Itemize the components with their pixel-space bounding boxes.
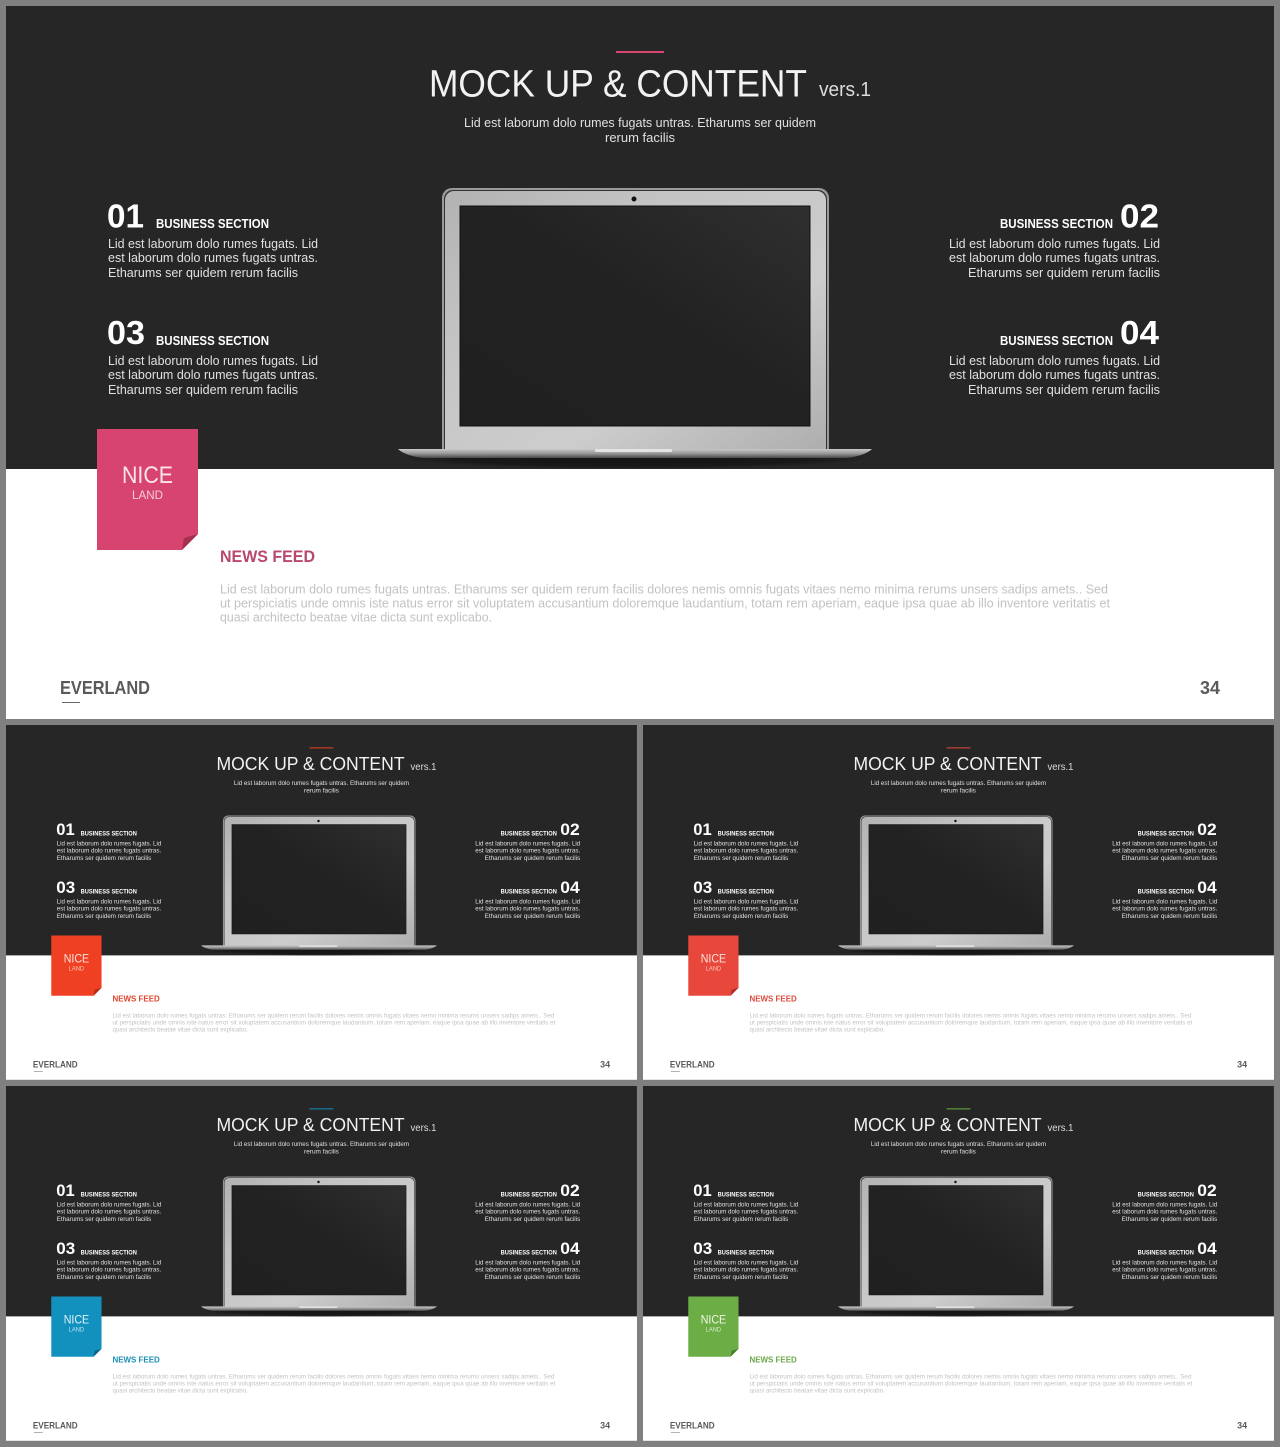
section 02 — [1112, 821, 1218, 862]
section 03: 03 — [693, 879, 712, 897]
section 01: Lid est laborum dolo rumes fugats. Lid — [694, 840, 799, 847]
section 04: Lid est laborum dolo rumes fugats. Lid — [949, 353, 1160, 368]
news feed heading: NEWS FEED — [112, 994, 160, 1004]
section 04: BUSINESS SECTION — [1000, 333, 1113, 348]
section 02: BUSINESS SECTION — [1000, 216, 1113, 231]
section 02 — [949, 198, 1160, 280]
section 03 — [693, 1240, 799, 1281]
section 02 — [475, 1182, 581, 1223]
section 03: est laborum dolo rumes fugats untras. — [57, 906, 161, 913]
section 02: Etharums ser quidem rerum facilis — [485, 855, 580, 862]
footer brand: EVERLAND — [670, 1420, 715, 1430]
section 04: est laborum dolo rumes fugats untras. — [949, 367, 1160, 382]
section 03: est laborum dolo rumes fugats untras. — [108, 367, 318, 382]
footer brand: EVERLAND — [33, 1059, 78, 1069]
section 01: Lid est laborum dolo rumes fugats. Lid — [57, 1201, 162, 1208]
section 01 — [56, 1182, 162, 1223]
section 04: Lid est laborum dolo rumes fugats. Lid — [475, 1260, 581, 1267]
slide: large pink — [6, 6, 1274, 719]
note: NICE LAND: NICE — [64, 951, 89, 965]
section 02: 02 — [560, 1182, 580, 1200]
section 01: 01 — [693, 821, 712, 839]
section 01: est laborum dolo rumes fugats untras. — [694, 1208, 798, 1215]
section 03: 03 — [693, 1240, 712, 1258]
section 01: Etharums ser quidem rerum facilis — [694, 855, 788, 862]
subtitle: rerum facilis — [941, 1149, 976, 1156]
subtitle: Lid est laborum dolo rumes fugats untras. Etharums ser quidem — [464, 115, 816, 130]
section 04 — [1112, 1240, 1218, 1281]
title: vers.1 — [1048, 762, 1074, 773]
news feed text: ut perspiciatis unde omnis iste natus error sit voluptatem accusantium doloremque laudantium, totam rem aperiam, eaque ipsa quae ab illo inventore veritatis et — [112, 1019, 556, 1026]
section 01 — [693, 1182, 799, 1223]
news feed text: Lid est laborum dolo rumes fugats untras. Etharums ser quidem rerum facilis dolores nemis omnis fugats vitaes nemo minima rerums unsers sadips amets.. Sed — [112, 1373, 555, 1380]
section 04: Lid est laborum dolo rumes fugats. Lid — [1112, 1260, 1218, 1267]
accent line — [310, 1107, 333, 1110]
news feed heading: NEWS FEED — [749, 994, 797, 1004]
section 01 — [693, 821, 799, 862]
slide: small blue — [6, 1086, 637, 1441]
section 04: BUSINESS SECTION — [501, 889, 557, 896]
news feed text: Lid est laborum dolo rumes fugats untras. Etharums ser quidem rerum facilis dolores nemis omnis fugats vitaes nemo minima rerums unsers sadips amets.. Sed — [220, 582, 1108, 596]
section 03: Lid est laborum dolo rumes fugats. Lid — [694, 1260, 799, 1267]
laptop — [201, 816, 437, 955]
section 02: Lid est laborum dolo rumes fugats. Lid — [475, 840, 581, 847]
section 01: 01 — [693, 1182, 712, 1200]
section 02: Lid est laborum dolo rumes fugats. Lid — [1112, 840, 1218, 847]
section 04: 04 — [560, 1240, 581, 1258]
title: MOCK UP & CONTENT — [216, 754, 405, 775]
slide: small coral — [643, 725, 1274, 1080]
news feed text: quasi architecto beatae vitae dicta sunt explicabo. — [220, 610, 492, 624]
subtitle: Lid est laborum dolo rumes fugats untras. Etharums ser quidem — [871, 780, 1046, 787]
section 03: 03 — [56, 879, 75, 897]
section 01: BUSINESS SECTION — [156, 216, 269, 231]
page number: 34 — [1237, 1059, 1247, 1069]
section 02 — [475, 821, 581, 862]
accent line — [310, 746, 333, 749]
section 01: est laborum dolo rumes fugats untras. — [694, 847, 798, 854]
title: vers.1 — [411, 762, 437, 773]
section 01: Etharums ser quidem rerum facilis — [57, 855, 151, 862]
subtitle — [871, 1141, 1046, 1156]
section 02: Lid est laborum dolo rumes fugats. Lid — [475, 1201, 581, 1208]
section 01: BUSINESS SECTION — [718, 1191, 774, 1198]
section 02: est laborum dolo rumes fugats untras. — [949, 250, 1160, 265]
subtitle: Lid est laborum dolo rumes fugats untras. Etharums ser quidem — [871, 1141, 1046, 1148]
news feed text: quasi architecto beatae vitae dicta sunt explicabo. — [112, 1387, 248, 1394]
section 04: Etharums ser quidem rerum facilis — [968, 382, 1160, 397]
section 04: 04 — [1197, 879, 1218, 897]
section 03: est laborum dolo rumes fugats untras. — [694, 1267, 798, 1274]
news feed text — [749, 1373, 1193, 1394]
title: vers.1 — [1048, 1123, 1074, 1134]
news feed heading: NEWS FEED — [112, 1355, 160, 1365]
note: NICE LAND: LAND — [706, 966, 722, 972]
section 02: 02 — [1120, 198, 1159, 234]
section 04: 04 — [1120, 314, 1160, 351]
note: NICE LAND: NICE — [701, 951, 726, 965]
title: MOCK UP & CONTENT — [853, 754, 1042, 775]
subtitle — [871, 780, 1046, 795]
section 04: est laborum dolo rumes fugats untras. — [1112, 1267, 1217, 1274]
news feed text: ut perspiciatis unde omnis iste natus error sit voluptatem accusantium doloremque laudantium, totam rem aperiam, eaque ipsa quae ab illo inventore veritatis et — [112, 1380, 556, 1387]
section 04 — [1112, 879, 1218, 920]
section 03: BUSINESS SECTION — [81, 1250, 137, 1257]
footer brand: EVERLAND — [33, 1420, 78, 1430]
section 03: Lid est laborum dolo rumes fugats. Lid — [57, 1260, 162, 1267]
subtitle — [234, 780, 409, 795]
section 01: 01 — [56, 1182, 75, 1200]
title: vers.1 — [411, 1123, 437, 1134]
section 01: BUSINESS SECTION — [81, 1191, 137, 1198]
section 03: Lid est laborum dolo rumes fugats. Lid — [108, 353, 318, 368]
title: MOCK UP & CONTENT — [216, 1115, 405, 1136]
section 04: Lid est laborum dolo rumes fugats. Lid — [475, 899, 581, 906]
section 04: est laborum dolo rumes fugats untras. — [475, 906, 580, 913]
section 04: Etharums ser quidem rerum facilis — [1122, 1274, 1217, 1281]
news feed text: Lid est laborum dolo rumes fugats untras. Etharums ser quidem rerum facilis dolores nemis omnis fugats vitaes nemo minima rerums unsers sadips amets.. Sed — [749, 1012, 1192, 1019]
note: NICE LAND: NICE — [701, 1312, 726, 1326]
section 03: Etharums ser quidem rerum facilis — [57, 913, 151, 920]
section 02: 02 — [1197, 1182, 1217, 1200]
slide: small red — [6, 725, 637, 1080]
section 04: Etharums ser quidem rerum facilis — [1122, 913, 1217, 920]
note: NICE LAND — [51, 1296, 102, 1357]
section 04: BUSINESS SECTION — [501, 1250, 557, 1257]
note: NICE LAND: LAND — [69, 966, 85, 972]
section 03: est laborum dolo rumes fugats untras. — [57, 1267, 161, 1274]
news feed text: quasi architecto beatae vitae dicta sunt explicabo. — [749, 1026, 885, 1033]
subtitle: rerum facilis — [304, 788, 339, 795]
section 04: est laborum dolo rumes fugats untras. — [1112, 906, 1217, 913]
footer brand: EVERLAND — [670, 1059, 715, 1069]
note: NICE LAND — [97, 429, 198, 550]
section 03 — [693, 879, 799, 920]
section 01: Lid est laborum dolo rumes fugats. Lid — [57, 840, 162, 847]
section 02: Lid est laborum dolo rumes fugats. Lid — [1112, 1201, 1218, 1208]
page number: 34 — [600, 1059, 610, 1069]
section 02: est laborum dolo rumes fugats untras. — [475, 847, 580, 854]
section 01: 01 — [107, 198, 144, 234]
section 02: Etharums ser quidem rerum facilis — [1122, 1216, 1217, 1223]
section 03: 03 — [107, 314, 145, 351]
news feed text: ut perspiciatis unde omnis iste natus error sit voluptatem accusantium doloremque laudantium, totam rem aperiam, eaque ipsa quae ab illo inventore veritatis et — [749, 1380, 1193, 1387]
section 04 — [949, 314, 1160, 397]
section 03: Lid est laborum dolo rumes fugats. Lid — [694, 899, 799, 906]
news feed heading: NEWS FEED — [749, 1355, 797, 1365]
laptop — [838, 1177, 1074, 1316]
laptop — [838, 816, 1074, 955]
section 01: Etharums ser quidem rerum facilis — [108, 265, 298, 280]
news feed text: ut perspiciatis unde omnis iste natus error sit voluptatem accusantium doloremque laudantium, totam rem aperiam, eaque ipsa quae ab illo inventore veritatis et — [749, 1019, 1193, 1026]
section 03: Etharums ser quidem rerum facilis — [57, 1274, 151, 1281]
section 04 — [475, 1240, 581, 1281]
section 01: Lid est laborum dolo rumes fugats. Lid — [108, 236, 318, 251]
news feed text: Lid est laborum dolo rumes fugats untras. Etharums ser quidem rerum facilis dolores nemis omnis fugats vitaes nemo minima rerums unsers sadips amets.. Sed — [112, 1012, 555, 1019]
section 02: BUSINESS SECTION — [501, 830, 557, 837]
note: NICE LAND: NICE — [64, 1312, 89, 1326]
news feed text — [749, 1012, 1193, 1033]
subtitle: Lid est laborum dolo rumes fugats untras. Etharums ser quidem — [234, 780, 409, 787]
section 03: BUSINESS SECTION — [156, 333, 269, 348]
section 02: Lid est laborum dolo rumes fugats. Lid — [949, 236, 1160, 251]
note: NICE LAND — [688, 935, 739, 996]
section 02 — [1112, 1182, 1218, 1223]
section 02: est laborum dolo rumes fugats untras. — [475, 1208, 580, 1215]
page number: 34 — [1200, 678, 1220, 698]
footer brand: EVERLAND — [60, 678, 150, 698]
subtitle: rerum facilis — [605, 130, 675, 145]
section 04: BUSINESS SECTION — [1138, 889, 1194, 896]
news feed text: quasi architecto beatae vitae dicta sunt explicabo. — [112, 1026, 248, 1033]
section 03: BUSINESS SECTION — [718, 889, 774, 896]
section 01: est laborum dolo rumes fugats untras. — [108, 250, 318, 265]
subtitle — [464, 115, 816, 145]
section 02: BUSINESS SECTION — [1138, 1191, 1194, 1198]
section 03: Etharums ser quidem rerum facilis — [694, 913, 788, 920]
section 03 — [107, 314, 318, 397]
section 02: Etharums ser quidem rerum facilis — [1122, 855, 1217, 862]
section 03: est laborum dolo rumes fugats untras. — [694, 906, 798, 913]
page number: 34 — [600, 1420, 610, 1430]
section 01: Etharums ser quidem rerum facilis — [694, 1216, 788, 1223]
note: NICE LAND: LAND — [706, 1327, 722, 1333]
section 01: est laborum dolo rumes fugats untras. — [57, 1208, 161, 1215]
accent line — [616, 51, 664, 53]
section 02: 02 — [560, 821, 580, 839]
section 02: est laborum dolo rumes fugats untras. — [1112, 847, 1217, 854]
section 03: Lid est laborum dolo rumes fugats. Lid — [57, 899, 162, 906]
note: NICE LAND: LAND — [132, 488, 163, 502]
section 02: 02 — [1197, 821, 1217, 839]
accent line — [947, 746, 970, 749]
note: NICE LAND: NICE — [122, 462, 173, 489]
section 03 — [56, 879, 162, 920]
section 04: Lid est laborum dolo rumes fugats. Lid — [1112, 899, 1218, 906]
section 02: est laborum dolo rumes fugats untras. — [1112, 1208, 1217, 1215]
news feed text: Lid est laborum dolo rumes fugats untras. Etharums ser quidem rerum facilis dolores nemis omnis fugats vitaes nemo minima rerums unsers sadips amets.. Sed — [749, 1373, 1192, 1380]
title: vers.1 — [819, 79, 871, 101]
title: MOCK UP & CONTENT — [429, 64, 807, 106]
subtitle — [234, 1141, 409, 1156]
news feed text: ut perspiciatis unde omnis iste natus error sit voluptatem accusantium doloremque laudantium, totam rem aperiam, eaque ipsa quae ab illo inventore veritatis et — [220, 596, 1110, 610]
subtitle: Lid est laborum dolo rumes fugats untras. Etharums ser quidem — [234, 1141, 409, 1148]
section 01: Lid est laborum dolo rumes fugats. Lid — [694, 1201, 799, 1208]
section 03: 03 — [56, 1240, 75, 1258]
section 01: BUSINESS SECTION — [718, 830, 774, 837]
section 04: 04 — [560, 879, 581, 897]
note: NICE LAND — [51, 935, 102, 996]
section 02: Etharums ser quidem rerum facilis — [485, 1216, 580, 1223]
section 01: Etharums ser quidem rerum facilis — [57, 1216, 151, 1223]
title: MOCK UP & CONTENT — [853, 1115, 1042, 1136]
section 04: Etharums ser quidem rerum facilis — [485, 1274, 580, 1281]
section 04: BUSINESS SECTION — [1138, 1250, 1194, 1257]
section 01 — [107, 198, 318, 280]
slide: small green — [643, 1086, 1274, 1441]
section 03 — [56, 1240, 162, 1281]
note: NICE LAND: LAND — [69, 1327, 85, 1333]
section 04: est laborum dolo rumes fugats untras. — [475, 1267, 580, 1274]
laptop — [201, 1177, 437, 1316]
section 04: Etharums ser quidem rerum facilis — [485, 913, 580, 920]
news feed text: quasi architecto beatae vitae dicta sunt explicabo. — [749, 1387, 885, 1394]
section 04: 04 — [1197, 1240, 1218, 1258]
section 01 — [56, 821, 162, 862]
news feed text — [220, 582, 1110, 624]
laptop — [398, 188, 872, 469]
section 03: BUSINESS SECTION — [718, 1250, 774, 1257]
section 01: est laborum dolo rumes fugats untras. — [57, 847, 161, 854]
section 03: Etharums ser quidem rerum facilis — [694, 1274, 788, 1281]
news feed heading: NEWS FEED — [220, 547, 315, 566]
note: NICE LAND — [688, 1296, 739, 1357]
section 03: BUSINESS SECTION — [81, 889, 137, 896]
news feed text — [112, 1012, 556, 1033]
section 02: BUSINESS SECTION — [1138, 830, 1194, 837]
page number: 34 — [1237, 1420, 1247, 1430]
subtitle: rerum facilis — [304, 1149, 339, 1156]
section 02: Etharums ser quidem rerum facilis — [968, 265, 1160, 280]
section 01: BUSINESS SECTION — [81, 830, 137, 837]
section 02: BUSINESS SECTION — [501, 1191, 557, 1198]
accent line — [947, 1107, 970, 1110]
section 01: 01 — [56, 821, 75, 839]
section 04 — [475, 879, 581, 920]
news feed text — [112, 1373, 556, 1394]
section 03: Etharums ser quidem rerum facilis — [108, 382, 298, 397]
subtitle: rerum facilis — [941, 788, 976, 795]
